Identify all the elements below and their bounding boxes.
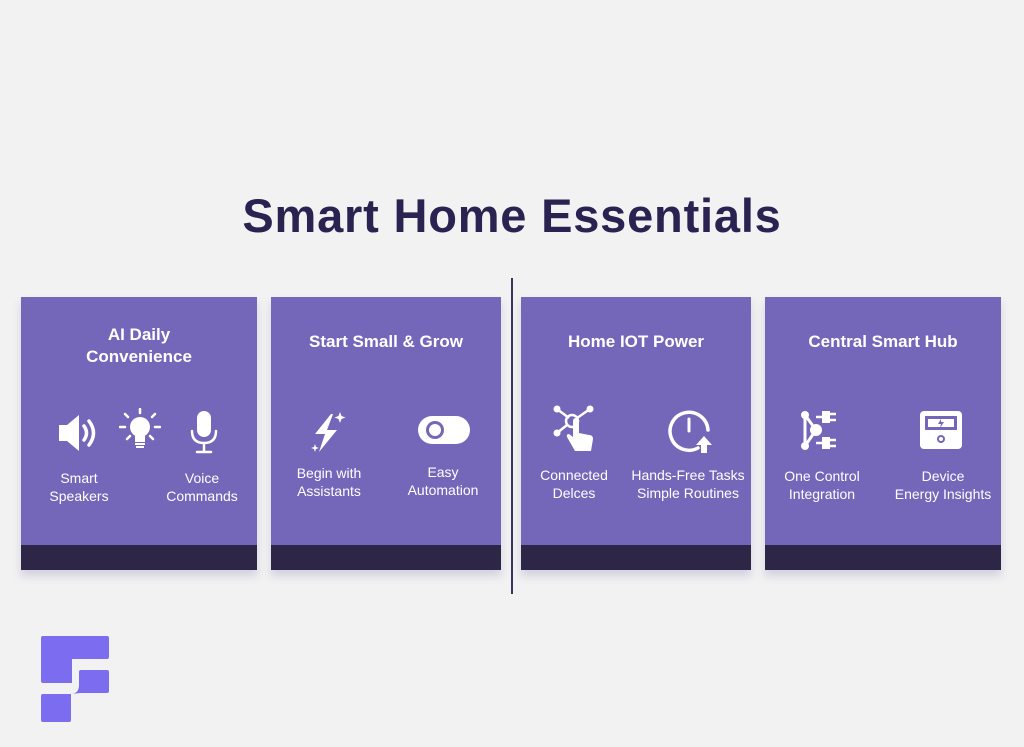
icon: microphone <box>190 411 218 454</box>
icon: energy monitor <box>920 411 962 449</box>
text: Easy Automation: Easy <box>427 464 459 480</box>
icon: speaker <box>59 415 96 451</box>
icon: toggle switch <box>418 416 470 444</box>
title: Smart Home Essentials <box>242 189 782 242</box>
text: Device Energy Insights <box>895 468 991 502</box>
text: Smart Speakers: Smart <box>60 470 98 486</box>
panel: Home IOT Power <box>521 297 751 570</box>
icon: sparkle bolt <box>311 412 346 452</box>
text: Hands-Free Tasks Simple Routines: Hands-Free Tasks <box>631 467 745 483</box>
text: Connected Delces: Connected <box>540 467 608 483</box>
icon: light bulb <box>119 408 161 448</box>
heading: AI Daily <box>108 325 170 344</box>
heading: Convenience <box>86 347 192 366</box>
text: Device Energy Insights: Device <box>922 468 964 484</box>
text: Device Energy Insights: Energy Insights <box>895 486 991 502</box>
panel: Central Smart Hub <box>765 297 1001 570</box>
icon: clock with arrow <box>668 410 712 453</box>
heading: Central Smart Hub <box>808 332 958 351</box>
text: Hands-Free Tasks Simple Routines: Simple Routines <box>637 485 739 501</box>
text: One Control Integration: One Control <box>784 468 860 484</box>
text: Voice Commands <box>166 470 238 504</box>
text: Begin with Assistants: Assistants <box>297 483 361 499</box>
logo <box>41 636 109 722</box>
text: Voice Commands: Commands <box>166 488 238 504</box>
divider line <box>511 278 513 594</box>
text: Connected Delces: Delces <box>553 485 595 501</box>
heading: Home IOT Power <box>568 332 704 351</box>
text: One Control Integration: Integration <box>789 486 855 502</box>
text: Begin with Assistants: Begin with <box>297 465 361 481</box>
text: Voice Commands: Voice <box>185 470 219 486</box>
panel: AI Daily Convenience <box>21 297 257 570</box>
text: One Control Integration <box>784 468 860 502</box>
text: Smart Speakers <box>49 470 109 504</box>
text: Begin with Assistants <box>297 465 361 499</box>
heading <box>86 325 192 366</box>
icon: hub plugs <box>801 411 836 450</box>
text: Hands-Free Tasks Simple Routines <box>631 467 745 501</box>
icon: connected hand <box>554 406 594 451</box>
heading: Start Small & Grow <box>309 332 463 351</box>
text: Easy Automation <box>408 464 478 498</box>
text: Connected Delces <box>540 467 608 501</box>
panel: Start Small & Grow <box>271 297 501 570</box>
text: Easy Automation: Automation <box>408 482 478 498</box>
text: Smart Speakers: Speakers <box>49 488 109 504</box>
